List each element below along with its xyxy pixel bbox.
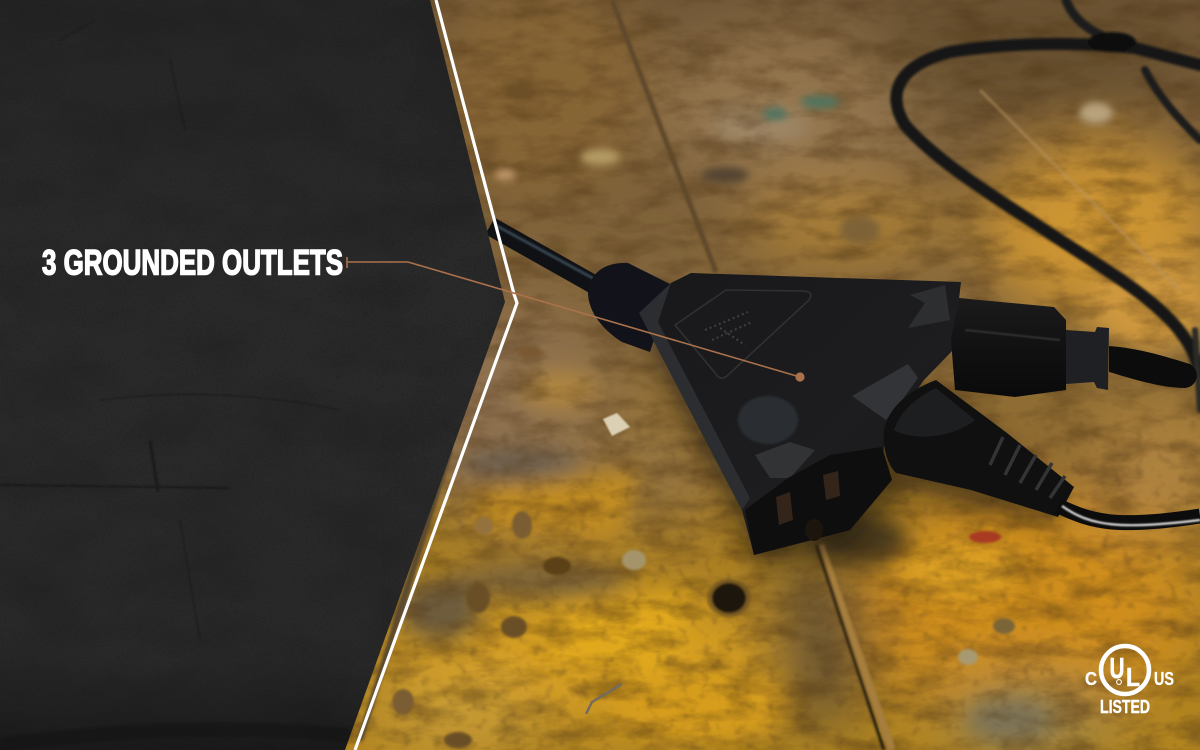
top right shoulder (908, 285, 950, 328)
body side face (639, 283, 750, 510)
device shadow (640, 330, 1060, 565)
raised triangle panel (675, 290, 811, 378)
UL listed logo: LISTED (1100, 697, 1150, 717)
lower plug (884, 380, 1200, 525)
UL listed logo: US (1154, 669, 1174, 689)
UL listed logo: U (1110, 653, 1124, 685)
outlet slots (776, 471, 840, 541)
dark panel (0, 0, 520, 750)
UL listed logo (1085, 646, 1174, 717)
background cord loop (896, 0, 1200, 410)
input cord (490, 226, 600, 288)
wood chip (603, 413, 630, 436)
outlet face (745, 447, 892, 555)
upper plug (951, 298, 1197, 397)
UL listed logo: C (1085, 669, 1097, 689)
staple (586, 684, 622, 714)
panel white outline (355, 0, 517, 750)
panel embossed marks (705, 312, 752, 345)
callout leader line (347, 257, 805, 382)
strain relief (588, 263, 672, 352)
photo: workbench surface (345, 0, 1200, 750)
scuffed circle (738, 396, 798, 444)
heading: 3 GROUNDED OUTLETS (42, 244, 343, 282)
main body (639, 273, 961, 555)
middle shoulder (852, 364, 918, 420)
device: three-outlet cord splitter (490, 226, 1200, 555)
UL listed logo: L (1126, 662, 1140, 692)
lower shoulder (755, 442, 815, 478)
